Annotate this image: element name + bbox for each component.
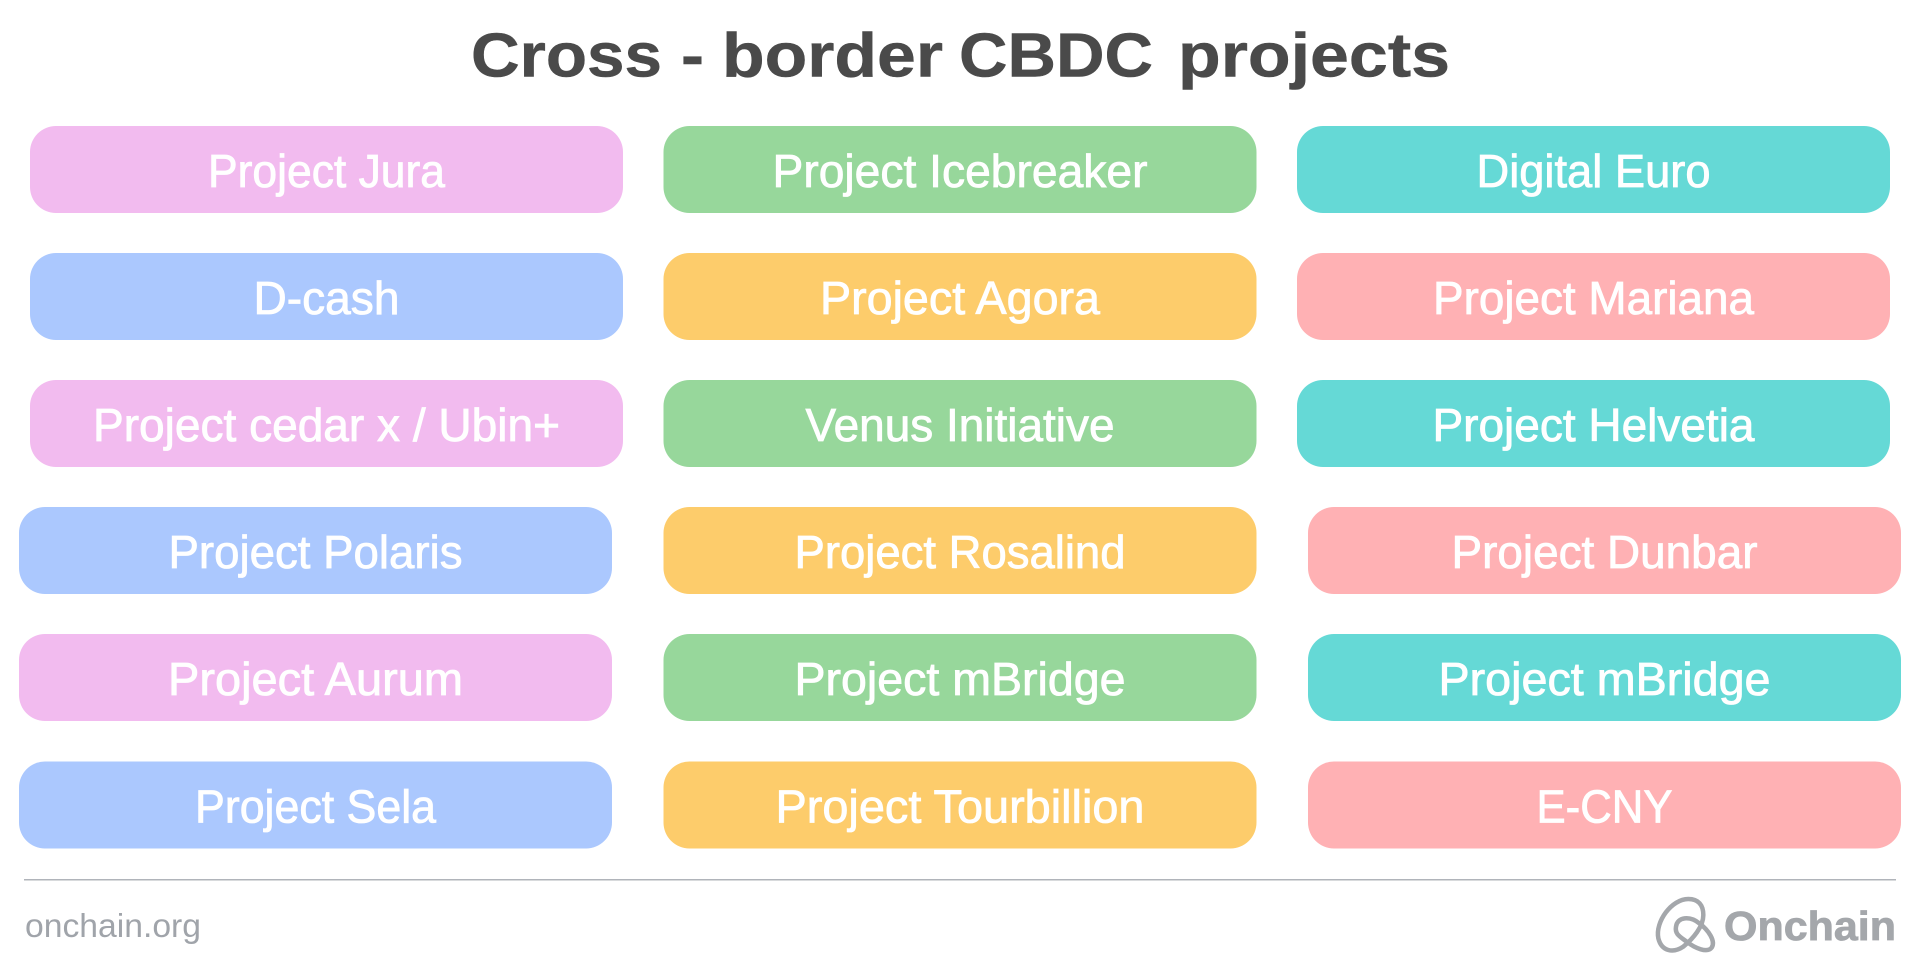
pill: Project Helvetia bbox=[1297, 380, 1890, 467]
pill: Project Agora bbox=[664, 253, 1256, 340]
pill: Digital Euro bbox=[1297, 126, 1890, 213]
pill: Project Mariana: Project Mariana bbox=[1433, 272, 1754, 324]
pill: E-CNY: E-CNY bbox=[1536, 780, 1672, 832]
pill: Project Icebreaker: Project Icebreaker bbox=[772, 145, 1148, 197]
pill: Venus Initiative bbox=[664, 380, 1256, 467]
pill: Project Polaris: Project Polaris bbox=[168, 526, 462, 578]
wordmark: Onchain bbox=[1724, 903, 1896, 949]
pill: Project Agora: Project Agora bbox=[820, 272, 1100, 324]
pill: Project Rosalind: Project Rosalind bbox=[794, 526, 1126, 578]
pill: Project Helvetia: Project Helvetia bbox=[1432, 399, 1755, 451]
logo: Onchain bbox=[1658, 899, 1896, 950]
pill: Project Dunbar: Project Dunbar bbox=[1452, 526, 1758, 578]
pill: Project Tourbillion: Project Tourbillion bbox=[776, 780, 1144, 832]
pill: Project Polaris bbox=[19, 507, 612, 594]
icon: Onchain knot bbox=[1658, 899, 1713, 950]
pill: Venus Initiative: Venus Initiative bbox=[806, 399, 1114, 451]
title: - bbox=[681, 22, 704, 90]
pill: Project mBridge (right) bbox=[1308, 634, 1901, 721]
pill: Project Jura bbox=[30, 126, 623, 213]
pill: Project Sela bbox=[19, 762, 612, 848]
pill: Project Jura: Project Jura bbox=[208, 145, 445, 197]
pill: E-CNY bbox=[1308, 762, 1901, 848]
footer url: onchain.org bbox=[25, 907, 201, 944]
pill: Digital Euro: Digital Euro bbox=[1476, 145, 1710, 197]
pill: Project Mariana bbox=[1297, 253, 1890, 340]
pill: Project Icebreaker bbox=[664, 126, 1256, 213]
pill: D-cash: D-cash bbox=[254, 272, 400, 324]
title: CBDC bbox=[959, 22, 1153, 90]
pill: Project Tourbillion bbox=[664, 762, 1256, 848]
pill: D-cash bbox=[30, 253, 623, 340]
pill: Project mBridge (right): Project mBridge bbox=[1438, 653, 1770, 705]
pill: Project Rosalind bbox=[664, 507, 1256, 594]
title bbox=[471, 22, 1450, 90]
title: border bbox=[722, 22, 943, 90]
pill: Project mBridge bbox=[664, 634, 1256, 721]
title: projects bbox=[1178, 22, 1450, 90]
pill: Project Aurum: Project Aurum bbox=[168, 653, 463, 705]
pill: Project cedar x / Ubin+: Project cedar x / Ubin+ bbox=[93, 399, 560, 451]
pill: Project mBridge: Project mBridge bbox=[794, 653, 1126, 705]
pill: Project Sela: Project Sela bbox=[195, 780, 436, 832]
pill: Project Dunbar bbox=[1308, 507, 1901, 594]
title: Cross bbox=[471, 22, 662, 90]
pill: Project cedar x / Ubin+ bbox=[30, 380, 623, 467]
pill: Project Aurum bbox=[19, 634, 612, 721]
